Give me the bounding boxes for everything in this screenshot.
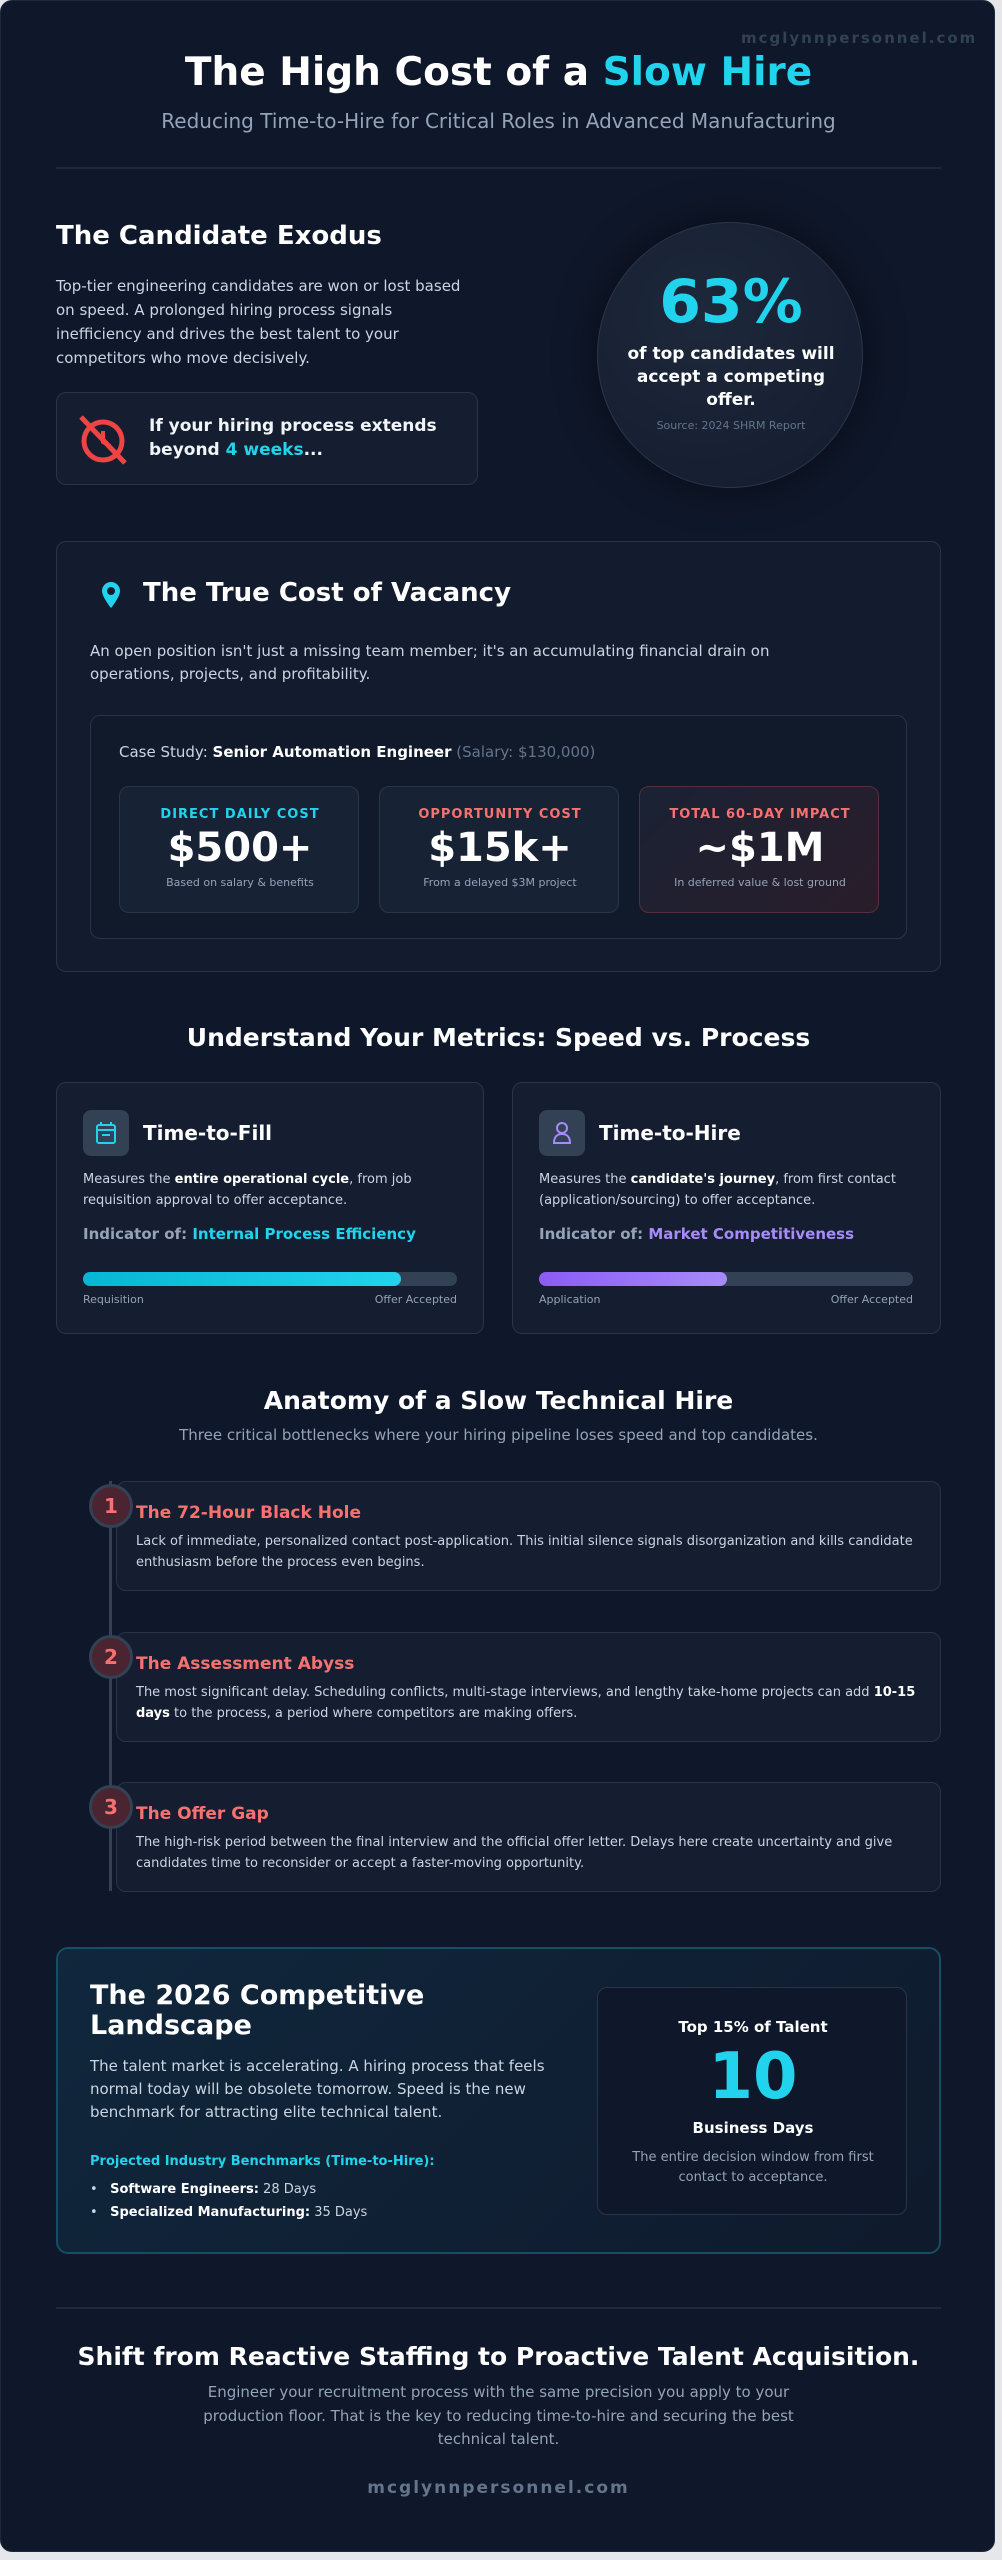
badge 2 bbox=[89, 1635, 133, 1679]
stat circle 63% bbox=[597, 222, 863, 488]
icon: no clock bbox=[79, 415, 127, 465]
bar: time-to-fill bbox=[83, 1272, 457, 1286]
icon: person bbox=[539, 1110, 585, 1156]
footer: mcglynnpersonnel.com bbox=[367, 2478, 630, 2498]
badge 1: 1 bbox=[104, 1494, 118, 1518]
badge 3 bbox=[89, 1785, 133, 1829]
case study box: Case Study: Senior Automation Engineer (Salary: $130,000) bbox=[119, 743, 595, 761]
text: exodus paragraph: Top-tier engineering candidates are won or lost based on speed. A prolonged hiring process signals inefficiency and drives the best talent to your competitors who move decisively. bbox=[56, 277, 460, 367]
stat box: 10 days: Top 15% of Talent bbox=[678, 2018, 828, 2036]
panel: 2026 landscape: The talent market is accelerating. A hiring process that feels normal today will be obsolete tomorrow. Speed is the new benchmark for attracting elite technical talent. bbox=[90, 2057, 545, 2121]
card: direct daily cost: DIRECT DAILY COST bbox=[160, 807, 320, 822]
card: total impact bbox=[639, 786, 879, 913]
panel: 2026 landscape: The 2026 Competitive Landscape bbox=[90, 1980, 424, 2041]
stat circle 63%: 63% bbox=[659, 267, 803, 337]
badge 3: 3 bbox=[104, 1795, 118, 1819]
icon: money pin bbox=[102, 582, 120, 608]
step 1 bbox=[89, 1481, 941, 1591]
card: total impact: ~$1M bbox=[696, 825, 824, 871]
watermark top: mcglynnpersonnel.com bbox=[741, 29, 977, 47]
section: candidate exodus bbox=[56, 221, 460, 367]
card: opportunity cost: OPPORTUNITY COST bbox=[418, 807, 582, 822]
step 2: The Assessment Abyss bbox=[136, 1654, 354, 1674]
card: time-to-hire: Offer Accepted bbox=[831, 1293, 913, 1306]
card: total impact: In deferred value & lost ground bbox=[674, 876, 846, 889]
card: direct daily cost bbox=[119, 786, 359, 913]
text: An open position isn't just a missing team member; it's an accumulating financial drain on operations, projects, and profitability. bbox=[90, 642, 769, 683]
card: direct daily cost: Based on salary & benefits bbox=[166, 876, 314, 889]
card: time-to-fill bbox=[56, 1082, 484, 1334]
card: time-to-hire bbox=[512, 1082, 941, 1334]
step 3: The Offer Gap bbox=[136, 1804, 269, 1824]
card: opportunity cost: From a delayed $3M project bbox=[423, 876, 577, 889]
title: The High Cost of a Slow Hire bbox=[185, 50, 812, 95]
bar: time-to-hire bbox=[539, 1272, 913, 1286]
step 2: The most significant delay. Scheduling conflicts, multi-stage interviews, and lengthy take-home projects can add 10-15 days to the process, a period where competitors are making offers. bbox=[136, 1685, 915, 1721]
text: callout: If your hiring process extends beyond 4 weeks... bbox=[149, 416, 437, 460]
panel: 2026 landscape: • Software Engineers: 28 Days bbox=[90, 2182, 316, 2197]
step 1: The 72-Hour Black Hole bbox=[136, 1503, 361, 1523]
heading: metrics: Understand Your Metrics: Speed vs. Process bbox=[187, 1023, 810, 1052]
case study box bbox=[90, 715, 907, 939]
card: time-to-fill: Time-to-Fill bbox=[143, 1121, 272, 1145]
callout: 4 weeks bbox=[56, 392, 478, 485]
heading: anatomy: Anatomy of a Slow Technical Hire bbox=[264, 1386, 733, 1415]
card: time-to-hire: Indicator of: Market Competitiveness bbox=[539, 1225, 854, 1243]
stat box: 10 days bbox=[597, 1987, 907, 2215]
panel: 2026 landscape bbox=[56, 1947, 941, 2254]
card: time-to-fill: Requisition bbox=[83, 1293, 144, 1306]
closing text: Engineer your recruitment process with the same precision you apply to your production floor. That is the key to reducing time-to-hire and securing the best technical talent. bbox=[203, 2383, 794, 2448]
stat box: 10 days: Business Days bbox=[693, 2119, 813, 2137]
card: opportunity cost: $15k+ bbox=[428, 825, 572, 871]
heading: candidate exodus: The Candidate Exodus bbox=[56, 221, 382, 251]
step 3 bbox=[89, 1782, 941, 1892]
card: time-to-fill: Offer Accepted bbox=[375, 1293, 457, 1306]
panel: 2026 landscape: Projected Industry Benchmarks (Time-to-Hire): bbox=[90, 2154, 435, 2169]
card: opportunity cost bbox=[379, 786, 619, 913]
stat circle 63%: of top candidates will accept a competing offer. bbox=[627, 344, 835, 410]
card: direct daily cost: $500+ bbox=[168, 825, 312, 871]
closing heading: Shift from Reactive Staffing to Proactive Talent Acquisition. bbox=[78, 2342, 919, 2371]
step 2 bbox=[89, 1632, 941, 1742]
step 3: The high-risk period between the final interview and the official offer letter. Delays here create uncertainty and give candidates time to reconsider or accept a faster-moving opportunity. bbox=[136, 1835, 892, 1871]
badge 1 bbox=[89, 1484, 133, 1528]
subtitle: anatomy: Three critical bottlenecks where your hiring pipeline loses speed and top candidates. bbox=[179, 1426, 818, 1444]
subtitle: Reducing Time-to-Hire for Critical Roles in Advanced Manufacturing bbox=[161, 109, 836, 133]
stat box: 10 days: 10 bbox=[708, 2040, 798, 2114]
stat circle 63%: Source: 2024 SHRM Report bbox=[657, 419, 805, 432]
stat box: 10 days: The entire decision window from first contact to acceptance. bbox=[632, 2150, 874, 2185]
step 1: Lack of immediate, personalized contact post-application. This initial silence signals disorganization and kills candidate enthusiasm before the process even begins. bbox=[136, 1534, 913, 1570]
card: time-to-fill: Indicator of: Internal Process Efficiency bbox=[83, 1225, 416, 1243]
card: total impact: TOTAL 60-DAY IMPACT bbox=[669, 807, 851, 822]
icon: calendar bbox=[83, 1110, 129, 1156]
panel: 2026 landscape: • Specialized Manufacturing: 35 Days bbox=[90, 2205, 367, 2220]
card: time-to-hire: Time-to-Hire bbox=[599, 1121, 741, 1145]
panel: true cost of vacancy bbox=[56, 541, 941, 972]
card: time-to-fill: Measures the entire operational cycle, from job requisition approval to offer acceptance. bbox=[83, 1172, 412, 1208]
card: time-to-hire: Measures the candidate's journey, from first contact (application/sourcing) to offer acceptance. bbox=[539, 1172, 896, 1208]
badge 2: 2 bbox=[104, 1645, 118, 1669]
card: time-to-hire: Application bbox=[539, 1293, 600, 1306]
heading: The True Cost of Vacancy bbox=[143, 578, 511, 608]
